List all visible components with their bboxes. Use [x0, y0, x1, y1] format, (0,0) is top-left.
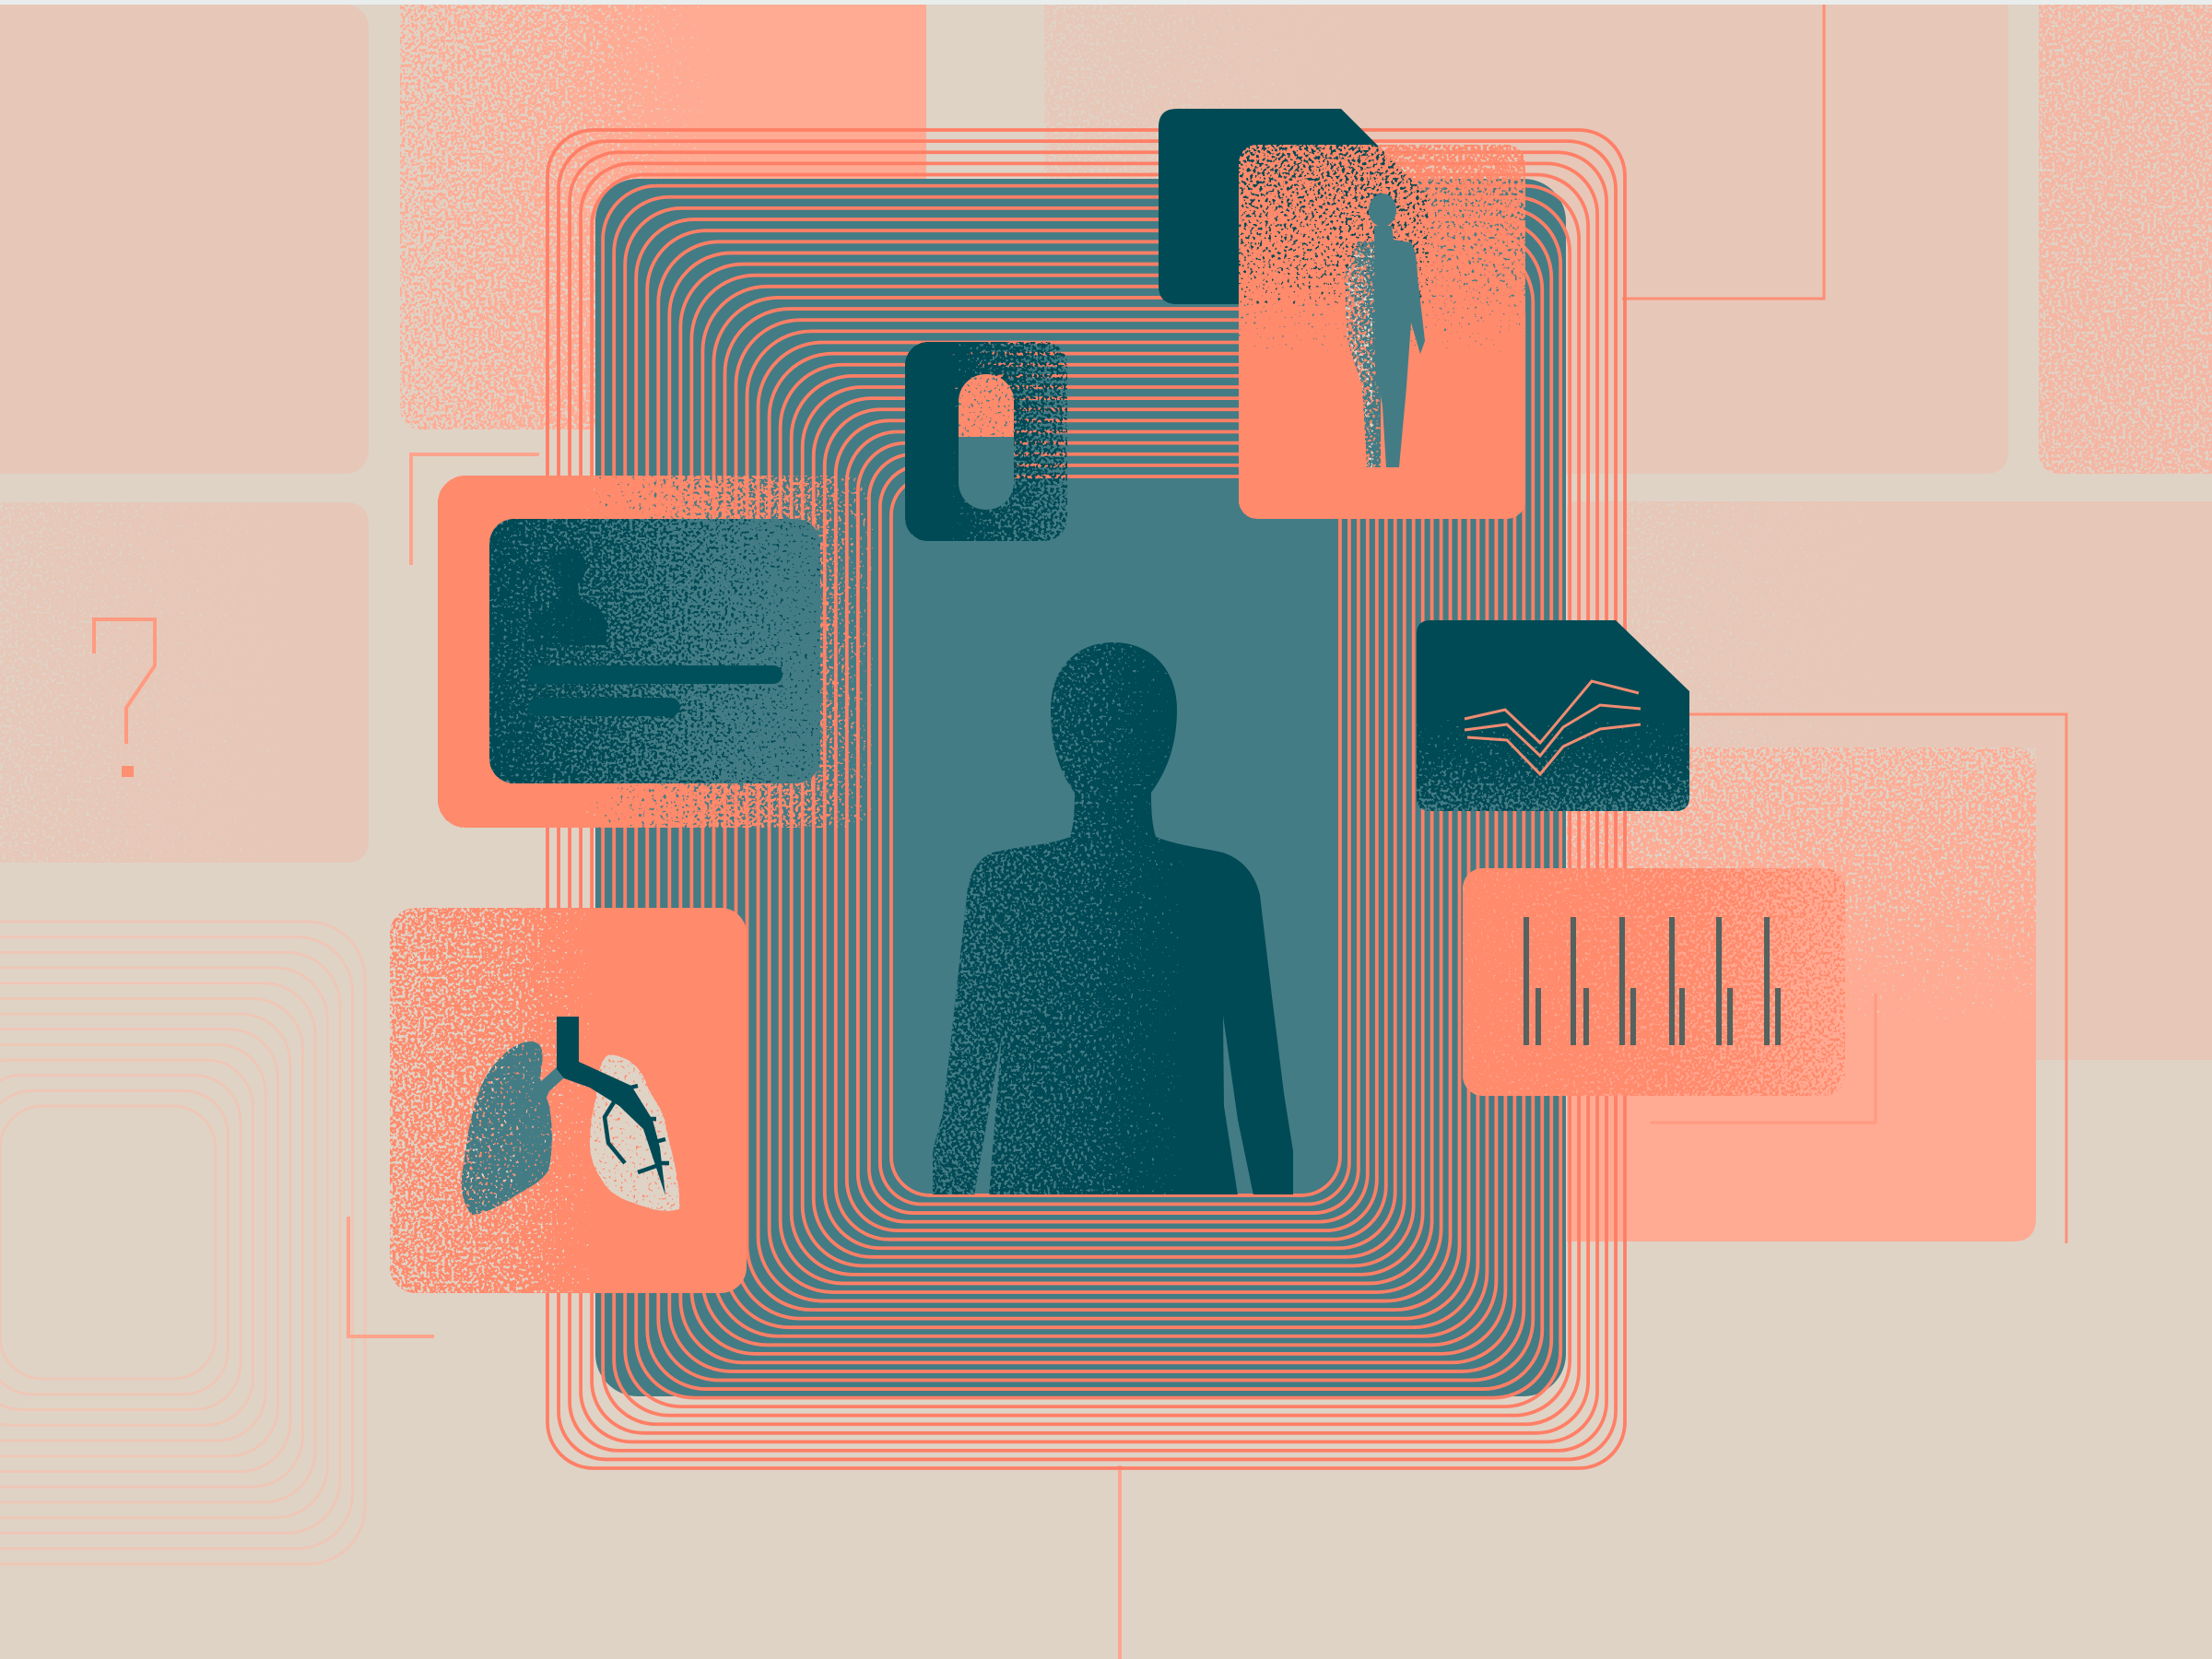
connector: right long bracket [1677, 714, 2066, 1243]
icon: lungs [462, 1017, 679, 1215]
card: dark document behind figure [1159, 109, 1429, 304]
icon: ID portrait [528, 548, 606, 645]
top edge strip [0, 0, 2212, 5]
central teal device panel [595, 179, 1566, 1396]
icon: question mark [94, 619, 155, 777]
panel: right middle [1567, 501, 2212, 1060]
panel: top left blank [0, 5, 369, 474]
panel: question mark [0, 502, 369, 863]
card: pill [905, 342, 1067, 541]
panel: top salmon textured [400, 5, 926, 429]
card: document with chevrons [1417, 620, 1689, 811]
connector: top right [1622, 5, 1824, 299]
connector: top left bracket [411, 454, 539, 565]
icon: stacked chevron lines [1465, 681, 1641, 774]
card: patient ID [438, 476, 873, 828]
connector: chart bracket [1651, 994, 1876, 1123]
chart: paired bars [1524, 917, 1781, 1045]
panel: top centre-right [1044, 5, 2008, 474]
connector: bottom vertical [1118, 1465, 1122, 1659]
connector: bottom left bracket [348, 1217, 434, 1336]
ID text line one [528, 665, 782, 684]
icon: small human figure [1344, 194, 1425, 467]
concentric line frames [547, 130, 1625, 1468]
card: lungs [390, 908, 747, 1293]
panel: right light salmon [1567, 747, 2036, 1241]
central human silhouette [922, 636, 1309, 1194]
ID text line two [528, 698, 680, 716]
ID inner panel [489, 519, 820, 783]
card: bar chart [1463, 868, 1845, 1096]
icon: capsule [959, 374, 1014, 510]
panel: faint concentric frames [0, 922, 365, 1564]
card: dissolving figure [1239, 145, 1525, 519]
panel: top right textured [2039, 5, 2212, 474]
